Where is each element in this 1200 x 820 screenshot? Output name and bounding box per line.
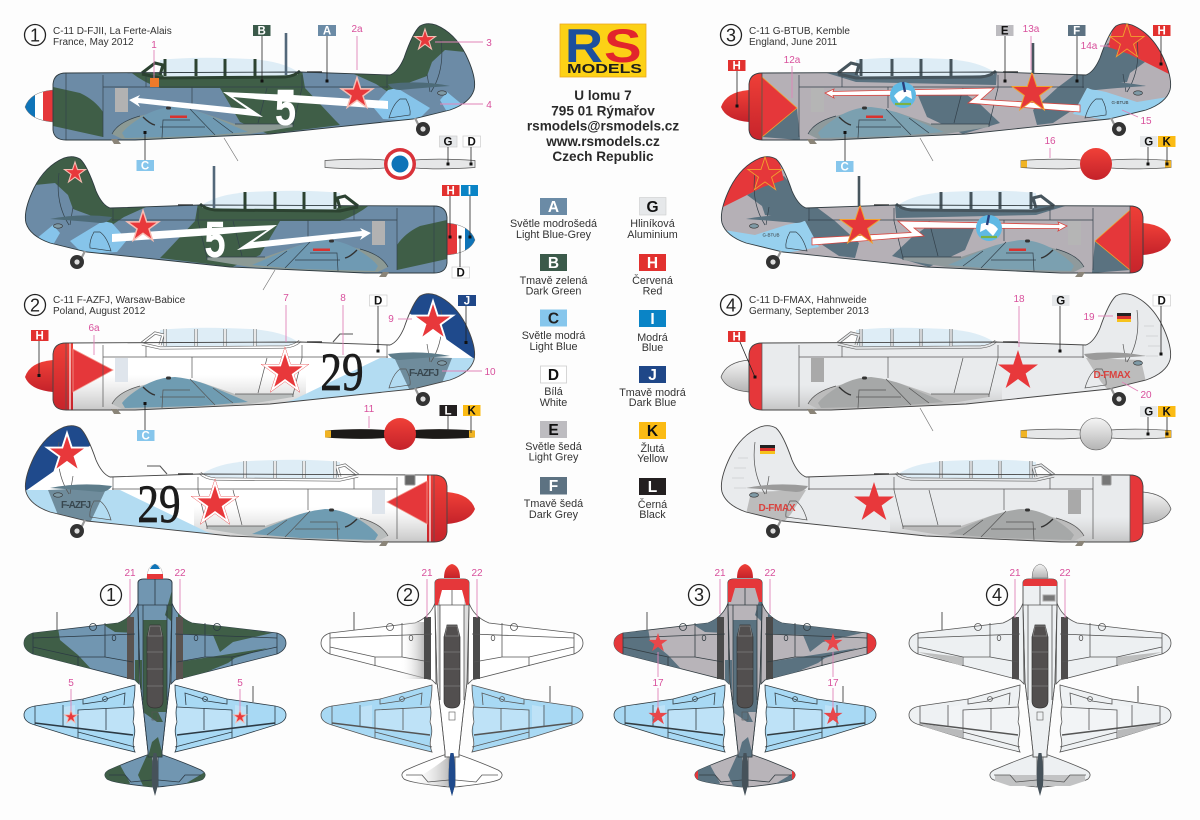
colour callouts and reference numbers 3: G bbox=[1144, 136, 1153, 148]
orange marking 1 bbox=[150, 78, 159, 87]
legend item I: I bbox=[650, 311, 655, 328]
legend item G: Hliníková bbox=[630, 218, 675, 230]
plan view: aircraft 2 bbox=[321, 564, 583, 796]
plan view: aircraft 3 bbox=[605, 564, 881, 796]
heading: scheme 4 caption: C-11 D-FMAX, Hahnweide bbox=[749, 295, 867, 306]
legend item C: Light Blue bbox=[529, 341, 578, 353]
colour callouts and reference numbers 2: 8 bbox=[340, 293, 346, 304]
legend item K: K bbox=[647, 423, 659, 440]
plan 4 number: 4 bbox=[992, 585, 1002, 605]
colour callouts and reference numbers 3: E bbox=[1001, 26, 1009, 38]
plan 1 labels: 5 bbox=[68, 678, 74, 689]
colour callouts and reference numbers 2 bbox=[31, 293, 496, 442]
colour callouts and reference numbers 2: D bbox=[374, 296, 382, 308]
plan 2 number: 2 bbox=[403, 585, 413, 605]
legend item J bbox=[619, 366, 686, 409]
legend item A: Light Blue-Grey bbox=[516, 229, 592, 241]
plan 4 number bbox=[986, 584, 1008, 606]
aircraft 4 left side profile bbox=[721, 294, 1171, 415]
logo: RS Models bbox=[560, 20, 646, 77]
plan 2 number bbox=[398, 584, 418, 606]
legend item E: Světle šedá bbox=[525, 441, 582, 453]
plan 2 labels: 21 bbox=[421, 568, 433, 579]
colour callouts and reference numbers 2: L bbox=[444, 406, 452, 418]
colour callouts and reference numbers 3: 14a bbox=[1081, 41, 1098, 52]
legend item E: E bbox=[548, 422, 559, 439]
heading: scheme 2 caption: Poland, August 2012 bbox=[53, 306, 146, 317]
exhaust vent right side bbox=[405, 475, 415, 485]
heading: scheme 4 caption: Germany, September 2013 bbox=[749, 306, 869, 317]
colour callouts and reference numbers 3: C bbox=[841, 162, 849, 174]
legend item B bbox=[520, 254, 587, 298]
panel: aircraft 3 profiles bbox=[716, 20, 1176, 278]
legend item I: Modrá bbox=[637, 332, 668, 344]
plan 3 labels: 21 bbox=[714, 568, 726, 579]
legend item D: Bílá bbox=[544, 386, 563, 398]
plan 2 lower wings bbox=[321, 685, 583, 752]
legend item B: B bbox=[548, 255, 559, 272]
colour callouts and reference numbers 3: 16 bbox=[1044, 136, 1056, 147]
legend item L: L bbox=[648, 479, 657, 496]
plan 3 labels: 22 bbox=[764, 568, 776, 579]
colour callouts and reference numbers 3: H bbox=[1158, 26, 1166, 38]
colour callouts and reference numbers 1: C bbox=[141, 160, 149, 172]
colour callouts and reference numbers 2: K bbox=[468, 406, 477, 418]
colour callouts and reference numbers 3 bbox=[728, 24, 1176, 174]
registration G-BTUB right side: G-BTUB bbox=[762, 232, 780, 238]
colour callouts and reference numbers 1 bbox=[136, 24, 492, 290]
panel: aircraft 4 profiles bbox=[720, 294, 1176, 547]
colour callouts and reference numbers 4: H bbox=[733, 332, 741, 344]
black number 29: 29 bbox=[320, 341, 364, 402]
aircraft 3 left side profile bbox=[721, 20, 1176, 145]
legend item C: Světle modrá bbox=[522, 330, 585, 342]
colour callouts and reference numbers 1: 1 bbox=[151, 40, 157, 51]
colour callouts and reference numbers 1: A bbox=[323, 26, 331, 38]
heading: scheme 4 number: 4 bbox=[726, 296, 736, 316]
legend item D: D bbox=[548, 367, 559, 384]
plan 2 labels: 22 bbox=[471, 568, 483, 579]
legend item I: Blue bbox=[642, 342, 663, 354]
propeller 3 bbox=[1021, 148, 1171, 180]
aircraft 1 left side profile bbox=[20, 20, 475, 144]
white number 5 right side: 5 bbox=[204, 211, 226, 268]
legend item B: Dark Green bbox=[526, 286, 581, 298]
legend item E bbox=[525, 421, 582, 464]
legend item K: Yellow bbox=[637, 453, 668, 465]
aircraft 2 left side profile bbox=[25, 290, 480, 415]
colour callouts and reference numbers 3: F bbox=[1073, 26, 1080, 38]
heading: scheme 1 caption: C-11 D-FJII, La Ferte-Alais bbox=[53, 26, 172, 37]
legend item K: Žlutá bbox=[640, 442, 665, 455]
plan view: aircraft 1 bbox=[15, 564, 286, 796]
colour callouts and reference numbers 2: 11 bbox=[364, 404, 375, 415]
legend item L bbox=[638, 478, 667, 521]
legend item I bbox=[637, 310, 668, 354]
colour callouts and reference numbers 1: B bbox=[258, 26, 266, 38]
legend item B: Tmavě zelená bbox=[520, 275, 587, 287]
plan 3 labels: 17 bbox=[652, 678, 664, 689]
registration D-FMAX: D-FMAX bbox=[1094, 370, 1131, 381]
colour callouts and reference numbers 4: D bbox=[1158, 296, 1166, 308]
plan 3 wing stars bbox=[648, 633, 843, 724]
heading: scheme 3 caption: England, June 2011 bbox=[749, 37, 838, 48]
colour callouts and reference numbers 2: 7 bbox=[283, 293, 289, 304]
legend item L: Černá bbox=[638, 498, 667, 511]
contact address bbox=[527, 88, 679, 164]
colour callouts and reference numbers 1: H bbox=[447, 186, 455, 198]
legend item H: Červená bbox=[632, 274, 673, 287]
heading: scheme 3 number bbox=[720, 24, 742, 46]
legend item C bbox=[522, 310, 585, 353]
colour callouts and reference numbers 2: J bbox=[464, 296, 470, 308]
registration D-FMAX right side: D-FMAX bbox=[758, 503, 796, 514]
legend item F: Tmavě šedá bbox=[524, 498, 583, 510]
legend item D bbox=[540, 366, 567, 409]
legend item J: Tmavě modrá bbox=[619, 387, 686, 399]
legend item E: Light Grey bbox=[529, 452, 579, 464]
plan 1 number: 1 bbox=[106, 585, 116, 605]
registration F-AZFJ: F-AZFJ bbox=[409, 368, 439, 379]
plan 4 upper surface bbox=[909, 564, 1171, 796]
contact address: Czech Republic bbox=[552, 149, 654, 164]
colour callouts and reference numbers 2: C bbox=[142, 430, 150, 442]
legend item H: H bbox=[647, 255, 658, 272]
colour callouts and reference numbers 3: 13a bbox=[1023, 24, 1040, 35]
panel: aircraft 1 profiles bbox=[20, 20, 492, 290]
propeller 4 bbox=[1021, 418, 1171, 450]
heading: scheme 2 number: 2 bbox=[30, 296, 40, 316]
heading: scheme 1 caption: France, May 2012 bbox=[53, 37, 134, 48]
legend item A: A bbox=[548, 199, 559, 216]
colour callouts and reference numbers 3: 15 bbox=[1140, 116, 1152, 127]
legend item H: Red bbox=[643, 286, 662, 298]
plan 3 labels: 17 bbox=[827, 678, 839, 689]
German flag bbox=[1117, 313, 1131, 322]
legend item C: C bbox=[548, 310, 559, 328]
plan 2 upper surface bbox=[321, 564, 583, 796]
panel: aircraft 2 profiles bbox=[20, 290, 496, 547]
colour callouts and reference numbers 2: H bbox=[36, 330, 44, 342]
legend item F: F bbox=[549, 478, 558, 495]
colour callouts and reference numbers 3: H bbox=[733, 60, 741, 72]
exhaust vent right side bbox=[1102, 475, 1111, 485]
plan 3 labels bbox=[652, 568, 839, 707]
legend item H bbox=[632, 254, 673, 298]
legend item F: Dark Grey bbox=[529, 509, 579, 521]
colour callouts and reference numbers 2: 10 bbox=[484, 367, 496, 378]
plan 1 wing stars bbox=[64, 710, 247, 723]
colour callouts and reference numbers 3: K bbox=[1163, 136, 1172, 148]
logo: RS Models: R bbox=[565, 20, 603, 72]
plan 1 labels: 21 bbox=[124, 568, 136, 579]
registration G-BTUB: G-BTUB bbox=[1111, 100, 1129, 105]
white number 5: 5 bbox=[275, 79, 296, 136]
legend item D: White bbox=[540, 397, 567, 409]
contact address: 795 01 Rýmařov bbox=[551, 104, 655, 118]
legend item J: Dark Blue bbox=[629, 397, 676, 409]
aircraft 4 right side profile bbox=[721, 426, 1171, 547]
heading: scheme 2 caption: C-11 F-AZFJ, Warsaw-Babice bbox=[53, 295, 185, 306]
legend item G bbox=[627, 198, 678, 241]
heading: scheme 1 number: 1 bbox=[30, 26, 40, 46]
colour callouts and reference numbers 4: K bbox=[1163, 406, 1172, 418]
legend item L: Black bbox=[639, 509, 666, 521]
colour callouts and reference numbers 1: 2a bbox=[351, 24, 363, 35]
colour callouts and reference numbers 4 bbox=[728, 294, 1176, 436]
German flag right side bbox=[760, 445, 775, 454]
propeller 1 bbox=[325, 148, 475, 180]
plan 1 labels: 5 bbox=[237, 678, 243, 689]
colour callouts and reference numbers 4: G bbox=[1056, 296, 1065, 308]
plan 4 labels bbox=[1009, 568, 1071, 618]
legend item J: J bbox=[648, 367, 657, 384]
colour callouts and reference numbers 2: 6a bbox=[88, 323, 100, 334]
plan 2 labels bbox=[421, 568, 483, 618]
colour callouts and reference numbers 4: 19 bbox=[1083, 312, 1095, 323]
registration F-AZFJ right side: F-AZFJ bbox=[61, 500, 91, 511]
aircraft 3 right side profile bbox=[716, 153, 1171, 278]
aircraft 1 right side profile bbox=[25, 153, 480, 277]
legend item A bbox=[510, 198, 597, 241]
plan 1 lower wings bbox=[24, 685, 286, 752]
propeller 2 bbox=[325, 418, 475, 450]
plan 3 lower wings bbox=[614, 685, 876, 752]
heading: scheme 4 number bbox=[720, 294, 742, 316]
colour callouts and reference numbers 2: 9 bbox=[388, 314, 394, 325]
colour callouts and reference numbers 4: 18 bbox=[1013, 294, 1025, 305]
plan 4 lower wings bbox=[909, 685, 1171, 752]
logo: RS Models: S bbox=[604, 20, 642, 73]
legend: colour key bbox=[510, 198, 686, 521]
logo: RS Models: MODELS bbox=[567, 62, 642, 76]
colour callouts and reference numbers 3: 12a bbox=[784, 55, 801, 66]
plan view: aircraft 4 bbox=[909, 564, 1171, 796]
colour callouts and reference numbers 1: 3 bbox=[486, 38, 492, 49]
aircraft 2 right side profile bbox=[20, 422, 475, 547]
legend item F bbox=[524, 477, 583, 521]
contact address: U lomu 7 bbox=[574, 88, 632, 103]
plan 1 labels bbox=[68, 568, 243, 711]
plan 1 number bbox=[100, 584, 122, 606]
colour callouts and reference numbers 1: I bbox=[468, 186, 471, 198]
colour callouts and reference numbers 4: G bbox=[1144, 406, 1153, 418]
colour callouts and reference numbers 1: G bbox=[444, 136, 453, 148]
legend item A: Světle modrošedá bbox=[510, 218, 597, 230]
plan 4 labels: 22 bbox=[1059, 568, 1071, 579]
contact address: www.rsmodels.cz bbox=[545, 134, 660, 149]
heading: scheme 3 number: 3 bbox=[726, 26, 736, 46]
heading: scheme 3 caption: C-11 G-BTUB, Kemble bbox=[749, 26, 850, 37]
contact address: rsmodels@rsmodels.cz bbox=[527, 118, 679, 134]
plan 3 number bbox=[688, 584, 710, 606]
plan 3 number: 3 bbox=[694, 585, 704, 605]
heading: scheme 1 number bbox=[24, 24, 46, 46]
colour callouts and reference numbers 1: 4 bbox=[486, 100, 492, 111]
black number 29 right side: 29 bbox=[137, 473, 181, 534]
plan 4 labels: 21 bbox=[1009, 568, 1021, 579]
heading: scheme 2 number bbox=[24, 294, 46, 316]
legend item G: G bbox=[646, 199, 659, 216]
plan 3 upper surface bbox=[605, 564, 881, 796]
legend item K bbox=[637, 422, 668, 465]
colour callouts and reference numbers 4: 20 bbox=[1140, 390, 1152, 401]
legend item G: Aluminium bbox=[627, 229, 678, 241]
colour callouts and reference numbers 1: D bbox=[457, 268, 465, 280]
plan 1 labels: 22 bbox=[174, 568, 186, 579]
colour callouts and reference numbers 1: D bbox=[468, 136, 476, 148]
plan 1 upper surface bbox=[15, 564, 286, 796]
